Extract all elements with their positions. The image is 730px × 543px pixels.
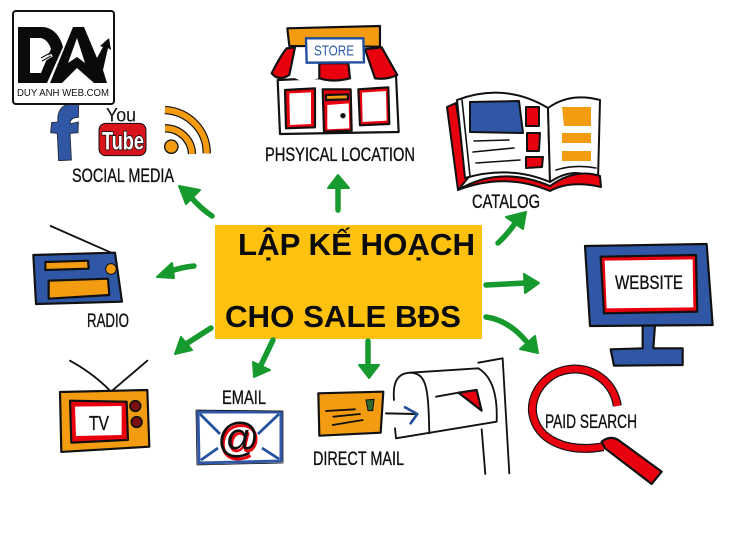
at sign: @ — [217, 414, 260, 461]
at sign: @ — [219, 416, 260, 463]
label: radio: RADIO — [87, 311, 129, 332]
icon: radio — [33, 226, 122, 304]
label: email: EMAIL — [222, 388, 266, 409]
label: direct mail: DIRECT MAIL — [313, 449, 404, 470]
icon: rss — [165, 110, 207, 154]
arrow: to direct mail — [359, 341, 379, 378]
label: social media: SOCIAL MEDIA — [72, 166, 174, 187]
center panel — [215, 225, 482, 339]
icon: youtube — [99, 105, 146, 156]
label: tv: TV — [89, 413, 110, 435]
icon: store — [272, 26, 399, 134]
arrow: to email — [253, 340, 273, 377]
icon: store: STORE — [314, 43, 354, 59]
arrow: to social media — [179, 186, 212, 216]
icon: website monitor — [585, 244, 713, 366]
icon: youtube: Tube — [102, 128, 144, 155]
arrow: to catalog — [498, 212, 526, 243]
label: physical location: PHSYICAL LOCATION — [265, 145, 415, 166]
icon: catalog book — [447, 93, 601, 191]
icon: envelope direct mail — [318, 392, 417, 436]
label: website: WEBSITE — [615, 273, 683, 294]
icon: email envelope — [196, 410, 283, 465]
logo text: DUY ANH WEB.COM — [17, 88, 109, 99]
icon: mailbox — [394, 358, 509, 474]
icon: youtube: You — [106, 105, 136, 126]
arrow: to tv — [175, 328, 211, 354]
heading line 2: CHO SALE BĐS — [225, 299, 461, 334]
heading line 1: LẬP KẾ HOẠCH — [238, 226, 475, 262]
label: catalog: CATALOG — [472, 192, 540, 213]
logo mark — [18, 27, 111, 83]
icon: paid search magnifier — [532, 369, 662, 484]
label: paid search: PAID SEARCH — [545, 412, 637, 433]
arrow: to physical location — [328, 175, 349, 210]
arrow: to radio — [157, 263, 194, 278]
icon: television — [60, 361, 149, 452]
arrow: to paid search — [486, 317, 538, 353]
arrow: to website — [486, 274, 539, 293]
icon: facebook — [51, 103, 79, 161]
logo — [13, 11, 114, 104]
